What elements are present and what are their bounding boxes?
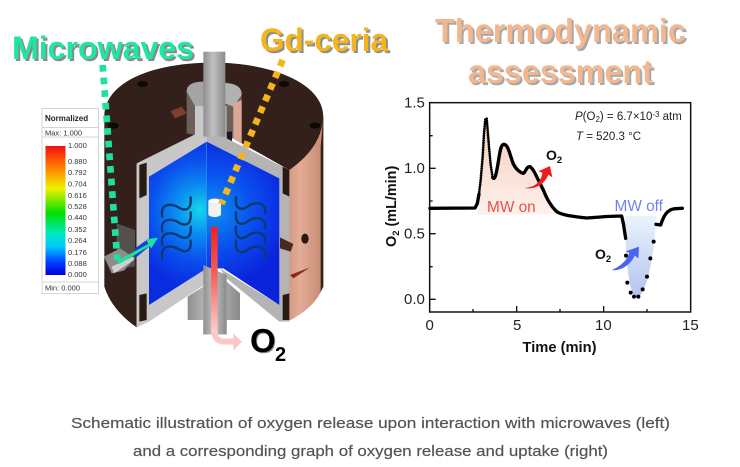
- legend: normalized color scale: [42, 108, 98, 294]
- plot frame: [430, 103, 691, 312]
- waveguide connector left: [104, 223, 149, 273]
- label: O2 uptake: O: [595, 246, 606, 262]
- O2 label, schematic: O: [251, 323, 277, 360]
- arrow: red O2 release: [524, 166, 552, 188]
- caption: Schematic illustration of oxygen release upon interaction with microwaves (left): [71, 415, 670, 432]
- chart conditions text: -3: [652, 110, 660, 119]
- label: O2 uptake: 2: [606, 254, 611, 265]
- legend: normalized color scale: 0.352: [68, 225, 87, 234]
- legend: normalized color scale: Normalized: [45, 114, 88, 123]
- chart axis numbers: [404, 94, 699, 334]
- label: MW on: MW on: [487, 199, 536, 216]
- legend: normalized color scale: 0.880: [68, 157, 87, 166]
- legend: normalized color scale: 0.000: [68, 270, 87, 279]
- upper well: [187, 82, 242, 143]
- chart axis numbers: 5: [513, 317, 521, 334]
- blue cavity right: [207, 142, 279, 305]
- area: MW off: [625, 216, 656, 297]
- title: Gd-ceria: Gd-ceria: [262, 24, 390, 60]
- title: Thermodynamic assessment: Thermodynamic: [437, 14, 688, 51]
- oxygen tube with outlet arrow: [211, 227, 242, 351]
- title: Thermodynamic assessment: Thermodynamic: [435, 12, 686, 49]
- chart conditions text: P(O: [575, 111, 595, 123]
- top lid: [104, 63, 323, 170]
- legend: normalized color scale: 0.088: [68, 259, 87, 268]
- bottom tube: [188, 282, 240, 334]
- chart conditions text: atm: [659, 111, 682, 123]
- legend: normalized color scale: 0.264: [68, 236, 87, 245]
- O2 label, schematic: 2: [275, 344, 286, 366]
- top tube: [203, 52, 225, 137]
- label: MW off: MW off: [614, 198, 664, 215]
- legend: normalized color scale: 0.792: [68, 168, 87, 177]
- chart conditions text: ) = 6.7×10: [600, 111, 652, 123]
- data points, sparse: [624, 240, 656, 299]
- chart conditions text: T = 520.3 °C: [576, 131, 641, 143]
- lid bolt holes: [108, 81, 320, 129]
- title: Thermodynamic assessment: assessment: [470, 55, 655, 92]
- chart conditions text: [575, 110, 682, 143]
- sample: Gd-ceria pellet: [208, 199, 221, 217]
- chart axis titles: (mL/min): [384, 166, 400, 230]
- waves right: [236, 197, 265, 257]
- chart axis numbers: 0.5: [404, 226, 425, 242]
- arrow: blue O2 uptake: [612, 247, 639, 270]
- chart conditions text: 2: [595, 115, 600, 124]
- legend: normalized color scale: Max: 1.000: [45, 128, 82, 138]
- reactor schematic: [103, 52, 323, 351]
- axis ticks: [430, 136, 647, 312]
- O2 label, schematic: O: [250, 322, 276, 359]
- chart axis numbers: 1.5: [404, 94, 425, 112]
- left gray wall: [137, 106, 207, 327]
- chart axis titles: Time (min): [522, 340, 597, 356]
- chart axis numbers: 10: [595, 317, 612, 334]
- label: O2 release: 2: [557, 155, 562, 166]
- chart axis numbers: 0: [426, 317, 434, 334]
- legend: normalized color scale: 0.704: [68, 180, 87, 188]
- chart axis titles: O: [384, 236, 400, 247]
- outer body right copper: [287, 117, 323, 322]
- O2 label, schematic: [250, 322, 286, 366]
- legend: normalized color scale: 0.616: [68, 191, 87, 200]
- caption: [71, 415, 670, 460]
- chart axis titles: 2: [391, 230, 402, 236]
- area: MW on: [477, 120, 557, 215]
- right gray wall: [207, 106, 289, 322]
- chart axis numbers: 15: [682, 317, 699, 334]
- waves left: [162, 197, 191, 258]
- outer body left: [104, 117, 137, 327]
- leader: microwaves: [103, 65, 117, 260]
- connector right: [280, 237, 293, 252]
- chart axis titles: [384, 166, 597, 356]
- chart: O2 flow vs time: [430, 103, 691, 312]
- microwave arrow: [117, 238, 158, 264]
- legend: normalized color scale: 1.000: [68, 141, 87, 150]
- title: Microwaves: Microwaves: [12, 30, 194, 66]
- legend: normalized color scale: 0.440: [68, 213, 87, 222]
- legend: normalized color scale: 0.528: [68, 202, 87, 211]
- blue cavity left: [149, 142, 207, 305]
- leader: Gd-ceria: [221, 60, 283, 204]
- title: Microwaves: Microwaves: [14, 32, 196, 68]
- title: Gd-ceria: Gd-ceria: [260, 22, 388, 58]
- legend: normalized color scale: 0.176: [68, 248, 87, 257]
- label: O2 release: O: [546, 147, 557, 163]
- data curve, solid: [430, 144, 682, 238]
- title: Thermodynamic assessment: [435, 12, 688, 92]
- copper port details: [301, 234, 309, 244]
- title: Thermodynamic assessment: assessment: [468, 53, 653, 90]
- data curve, dotted peak: [479, 118, 493, 194]
- legend: normalized color scale: Min: 0.000: [45, 284, 80, 292]
- chart axis numbers: 1.0: [404, 160, 425, 177]
- caption: and a corresponding graph of oxygen release and uptake (right): [133, 443, 608, 460]
- chart axis numbers: 0.0: [404, 291, 425, 308]
- wall slots: [139, 163, 289, 322]
